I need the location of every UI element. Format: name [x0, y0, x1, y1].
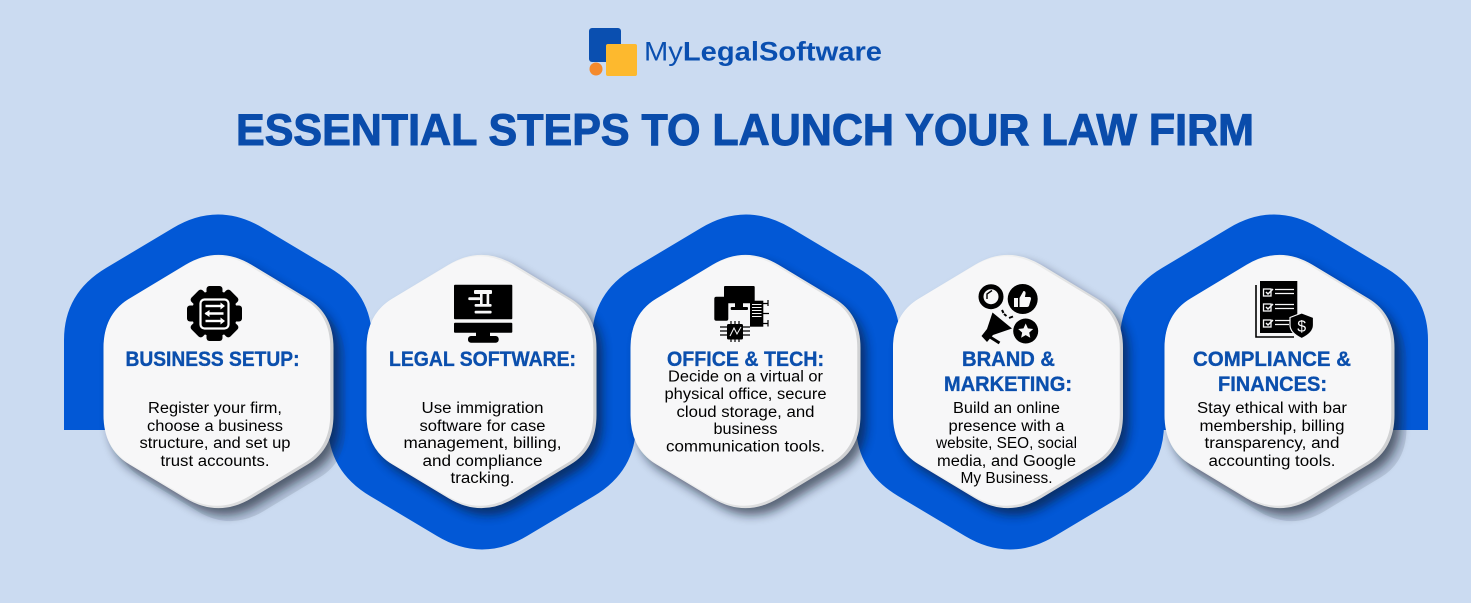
- body text: physical office, secure: [664, 386, 826, 403]
- heading: BUSINESS SETUP:: [126, 348, 300, 371]
- hexagon card: [104, 255, 346, 521]
- body text: business: [714, 421, 778, 438]
- heading: [1193, 348, 1351, 396]
- body text: [140, 400, 290, 470]
- body text: management, billing,: [404, 435, 562, 452]
- body text: accounting tools.: [1208, 453, 1336, 470]
- icon: monitor with gavel: [454, 285, 512, 343]
- body text: media, and Google: [937, 453, 1076, 470]
- heading: FINANCES:: [1218, 373, 1327, 396]
- icon: checklist with dollar shield: $: [1297, 318, 1306, 336]
- body text: tracking.: [450, 470, 514, 487]
- heading: OFFICE & TECH:: [667, 348, 824, 371]
- body text: [664, 369, 826, 456]
- panel: brand and marketing: [893, 255, 1129, 515]
- icon: devices, server and chip: [714, 286, 769, 342]
- panel: compliance and finances: [1164, 255, 1406, 521]
- logo wordmark: MyLegalSoftware: [644, 36, 882, 66]
- logo: [589, 28, 882, 76]
- body text: [404, 400, 562, 487]
- body text: trust accounts.: [160, 453, 270, 470]
- body text: My Business.: [960, 470, 1052, 487]
- hexagon card: [630, 255, 866, 515]
- logo mark: orange dot: [590, 62, 602, 76]
- body text: Build an online: [953, 400, 1060, 417]
- blue ribbon connecting the steps: [64, 214, 1428, 550]
- logo mark: yellow square: [606, 44, 637, 76]
- title: ESSENTIAL STEPS TO LAUNCH YOUR LAW FIRM: [236, 106, 1254, 155]
- body text: [1197, 400, 1347, 470]
- body text: and compliance: [422, 453, 542, 470]
- logo mark: blue square: [589, 28, 621, 62]
- body text: presence with a: [948, 418, 1065, 435]
- hexagon card: [893, 255, 1129, 515]
- body text: choose a business: [147, 418, 283, 435]
- icon: checklist with dollar shield: [1256, 281, 1314, 338]
- icon: marketing badges and megaphone: [981, 284, 1038, 344]
- heading: BRAND &: [962, 348, 1055, 371]
- body text: transparency, and: [1204, 435, 1340, 452]
- heading: COMPLIANCE &: [1193, 348, 1351, 371]
- hexagon card: [1164, 255, 1406, 521]
- body text: cloud storage, and: [676, 404, 814, 421]
- heading: MARKETING:: [944, 373, 1072, 396]
- body text: software for case: [420, 418, 546, 435]
- body text: communication tools.: [666, 439, 825, 456]
- body text: Register your firm,: [148, 400, 282, 417]
- body text: [935, 400, 1077, 487]
- heading: [944, 348, 1072, 396]
- body text: Decide on a virtual or: [668, 369, 823, 386]
- panel: legal software: [366, 255, 602, 515]
- body text: website, SEO, social: [935, 435, 1077, 452]
- panel: office and tech: [630, 255, 866, 515]
- heading: LEGAL SOFTWARE:: [389, 348, 576, 371]
- icon: gear with sliders: [187, 286, 242, 341]
- body text: Use immigration: [422, 400, 544, 417]
- body text: Stay ethical with bar: [1197, 400, 1347, 417]
- body text: membership, billing: [1200, 418, 1344, 435]
- hexagon card: [366, 255, 602, 515]
- panel: business setup: [104, 255, 346, 521]
- body text: structure, and set up: [140, 435, 290, 452]
